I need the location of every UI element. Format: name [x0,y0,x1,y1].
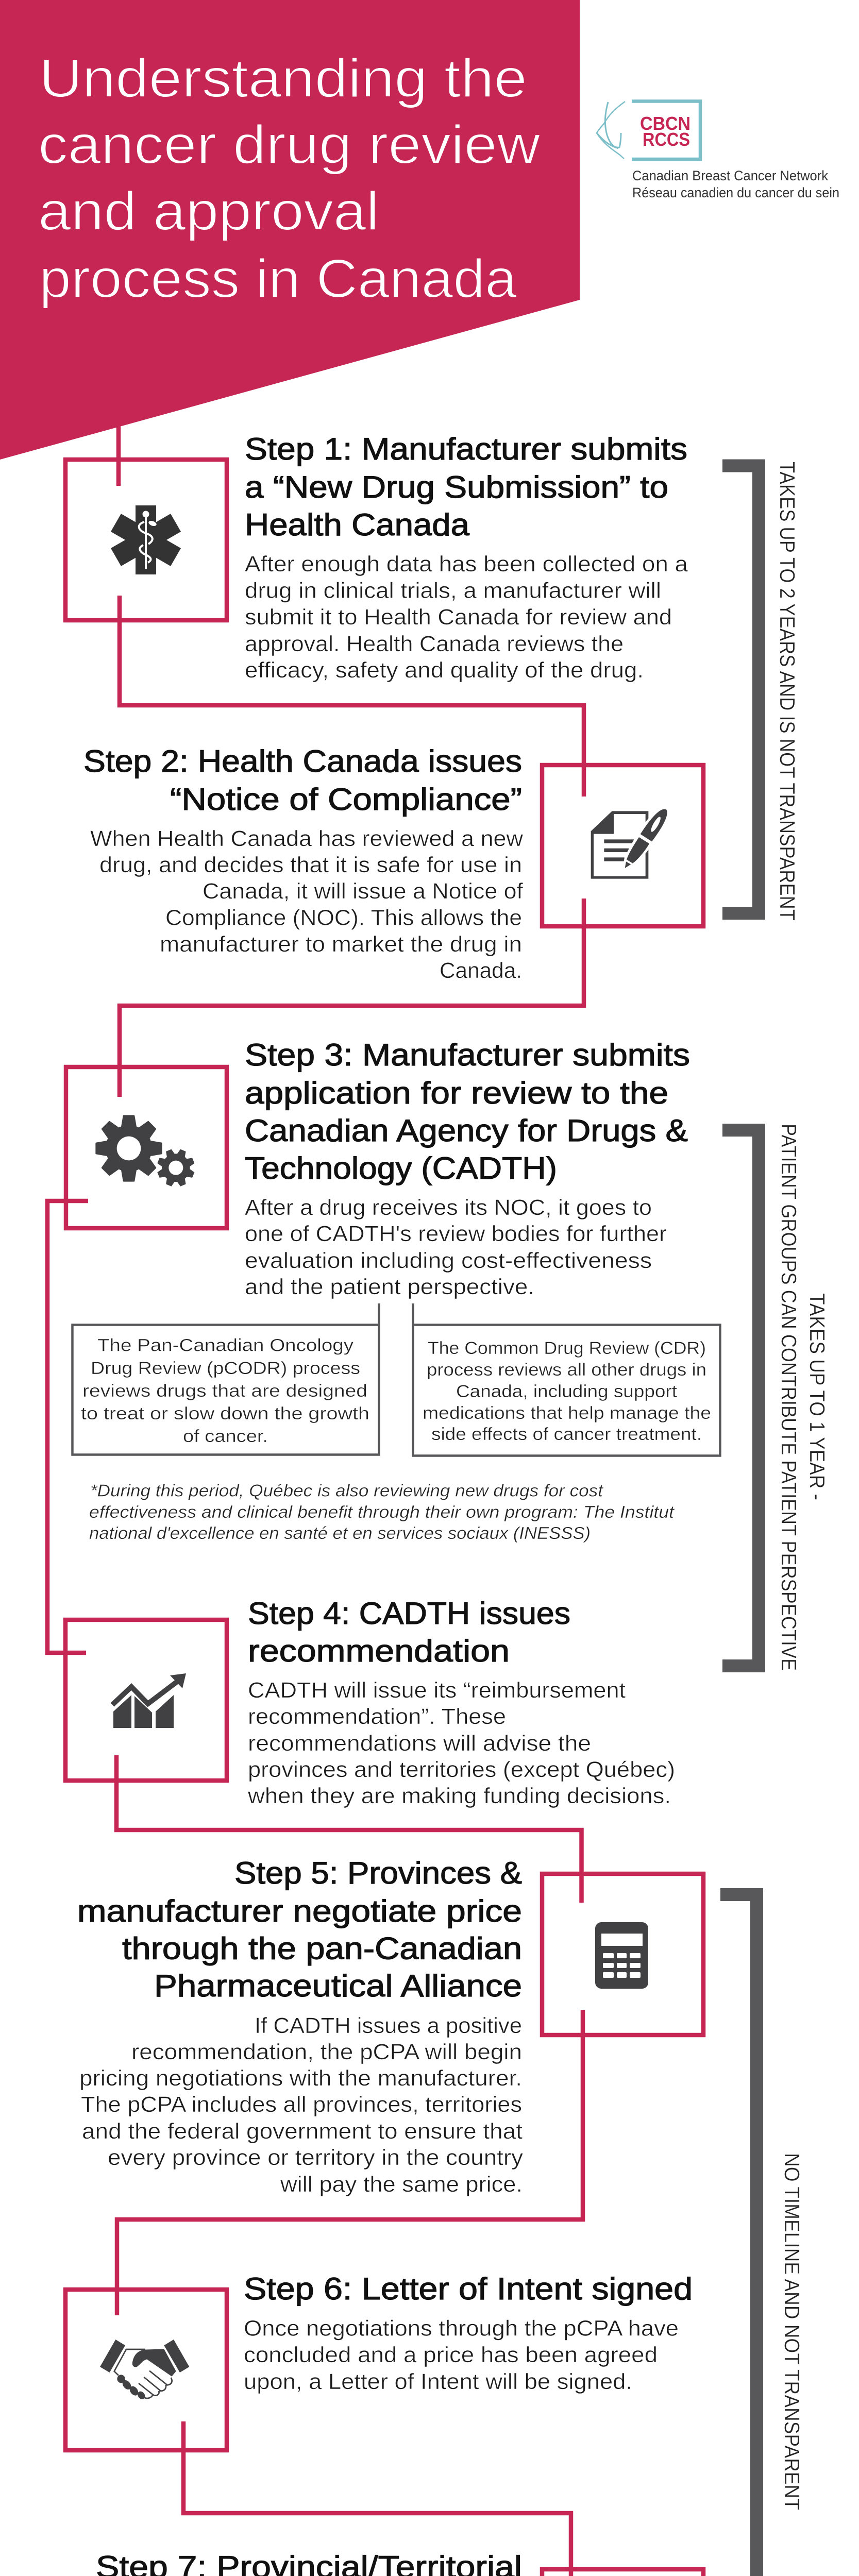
icon: star of life [111,505,181,574]
heading: step 3: Step 3: Manufacturer submits [245,1038,690,1072]
heading: step 1 [245,432,687,542]
logo: CBCN RCCS: RCCS [643,129,690,150]
text: step 6 [244,2316,679,2394]
bracket: no timeline [720,1895,804,2576]
heading: step 3 [245,1038,690,1185]
text: step 3: and the patient perspective. [245,1275,534,1299]
text: step 5: pricing negotiations with the manufacturer. [79,2066,522,2091]
heading: step 2 [83,744,522,817]
title: process in Canada [39,248,517,309]
heading: step 1: Step 1: Manufacturer submits [245,432,687,466]
text: step 4: recommendation”. These [248,1704,506,1729]
heading: step 4: recommendation [248,1634,510,1668]
panel: step 2 [83,744,703,983]
title: and approval [38,181,379,242]
callout: pCODR: to treat or slow down the growth [81,1404,369,1423]
connector: step 1 to step 2 [120,596,584,796]
text: step 5: The pCPA includes all provinces, territories [81,2092,522,2117]
connector: step 3 to step 4 [47,1201,88,1653]
logo: CBCN RCCS [597,101,839,200]
panel: step 1 [65,432,688,683]
text: step 2: Canada, it will issue a Notice of [203,879,524,904]
callout: CDR: side effects of cancer treatment. [431,1425,702,1444]
callout: pCODR: reviews drugs that are designed [82,1381,367,1401]
bracket: takes up to 2 years [722,462,799,921]
icon box: step 4 [65,1620,227,1781]
icon box: step 5 [542,1874,703,2035]
text: step 4: recommendations will advise the [248,1731,591,1756]
icon: calculator [595,1922,648,1989]
text: step 2: drug, and decides that it is safe for use in [99,853,522,877]
icon: gears [96,1116,195,1187]
heading: step 3: Canadian Agency for Drugs & [245,1113,688,1148]
header banner [0,0,580,460]
connector: step 5 to step 6 [117,2010,583,2315]
note: Québec INESSS: effectiveness and clinical benefit through their own program: The Institut [89,1502,675,1521]
text: step 2 [90,826,524,983]
side label: patient groups: PATIENT GROUPS CAN CONTRIBUTE PATIENT PERSPECTIVE [777,1124,801,1671]
callout: CDR: Canada, including support [456,1382,678,1401]
heading: step 2: “Notice of Compliance” [170,782,522,817]
icon: handshake [100,2340,189,2401]
side label: takes up to 1 year: TAKES UP TO 1 YEAR - [805,1293,829,1500]
text: step 2: Canada. [440,958,522,983]
icon box: step 7 [542,2569,703,2576]
text: step 6: Once negotiations through the pCPA have [244,2316,679,2341]
text: step 2: When Health Canada has reviewed a new [90,826,524,851]
heading: step 3: Technology (CADTH) [245,1151,557,1185]
icon: growth chart [112,1673,186,1728]
text: step 5: If CADTH issues a positive [255,2013,522,2038]
title: cancer drug review [38,114,540,175]
text: step 4: provinces and territories (except Québec) [248,1757,675,1782]
title [38,48,540,309]
text: step 2: manufacturer to market the drug in [160,932,522,957]
text: step 5: and the federal government to ensure that [82,2119,523,2144]
heading: step 5: Step 5: Provinces & [234,1856,522,1890]
note: Québec INESSS: *During this period, Québec is also reviewing new drugs for cost [90,1481,604,1500]
text: step 4: when they are making funding decisions. [247,1784,671,1808]
heading: step 2: Step 2: Health Canada issues [83,744,522,778]
callout: pCODR: of cancer. [183,1427,268,1446]
icon: document and pen [591,809,667,879]
text: step 4 [247,1678,675,1808]
text: step 5: will pay the same price. [280,2172,523,2197]
text: step 1: After enough data has been collected on a [245,552,688,577]
text: step 4: CADTH will issue its “reimbursement [248,1678,626,1703]
note: Québec INESSS: national d'excellence en santé et en services sociaux (INESSS) [89,1523,591,1543]
icon box: step 3 [66,1067,227,1228]
text: step 1: drug in clinical trials, a manufacturer will [245,579,661,603]
callout: CDR: medications that help manage the [423,1403,711,1423]
callout: pCODR [72,1303,379,1455]
text: step 2: Compliance (NOC). This allows the [165,906,522,930]
logo: CBCN RCCS: Réseau canadien du cancer du sein [632,185,839,200]
bracket: takes up to 1 year [722,1124,829,1671]
text: step 5 [79,2013,524,2197]
title: Understanding the [39,48,527,109]
logo: CBCN RCCS: CBCN [640,113,690,134]
heading: step 5: manufacturer negotiate price [77,1894,522,1928]
callout: CDR: The Common Drug Review (CDR) [428,1338,706,1358]
heading: step 5 [77,1856,522,2003]
logo: CBCN RCCS: Canadian Breast Cancer Network [632,168,828,183]
text: step 1: approval. Health Canada reviews the [245,632,624,656]
heading: step 5: Pharmaceutical Alliance [154,1969,522,2003]
heading: step 1: Health Canada [245,507,470,542]
side label: no timeline: NO TIMELINE AND NOT TRANSPARENT [780,2153,804,2510]
text: step 5: every province or territory in the country [108,2145,524,2170]
heading: step 1: a “New Drug Submission” to [245,470,668,504]
text: step 1: efficacy, safety and quality of the drug. [245,658,644,683]
icon box: step 1 [65,460,227,620]
panel: step 3 [66,1038,720,1543]
side label: takes up to 2 years: TAKES UP TO 2 YEARS AND IS NOT TRANSPARENT [776,462,799,921]
text: step 1 [245,552,688,683]
heading: step 3: application for review to the [245,1076,668,1110]
callout: pCODR: The Pan-Canadian Oncology [97,1336,353,1355]
text: step 3 [245,1195,667,1299]
callout: pCODR: Drug Review (pCODR) process [91,1359,360,1378]
callout: CDR [413,1303,720,1456]
heading: step 4 [248,1596,570,1668]
text: step 3: evaluation including cost-effectiveness [245,1248,652,1273]
connector: step 4 to step 5 [116,1755,581,1903]
icon box: step 2 [542,765,703,926]
text: step 6: concluded and a price has been agreed [244,2343,658,2367]
icon box: step 6 [65,2290,227,2450]
panel: step 7 [90,2550,703,2576]
panel: step 6 [65,2272,693,2450]
text: step 1: submit it to Health Canada for review and [245,605,672,630]
heading: step 6: Step 6: Letter of Intent signed [244,2272,693,2306]
connector: step 2 to step 3 [120,899,584,1097]
heading: step 5: through the pan-Canadian [122,1931,522,1966]
text: step 3: one of CADTH's review bodies for further [245,1222,667,1246]
panel: step 5 [77,1856,703,2197]
panel: step 4 [65,1596,675,1808]
text: step 6: upon, a Letter of Intent will be signed. [244,2369,632,2394]
connector: step 6 to step 7 [183,2421,571,2576]
text: step 5: recommendation, the pCPA will begin [131,2040,522,2064]
text: step 3: After a drug receives its NOC, it goes to [245,1195,652,1220]
callout: CDR: process reviews all other drugs in [427,1360,706,1380]
heading: step 4: Step 4: CADTH issues [248,1596,570,1631]
connector: header to step 1 [116,425,121,486]
note: Québec INESSS [89,1481,675,1543]
